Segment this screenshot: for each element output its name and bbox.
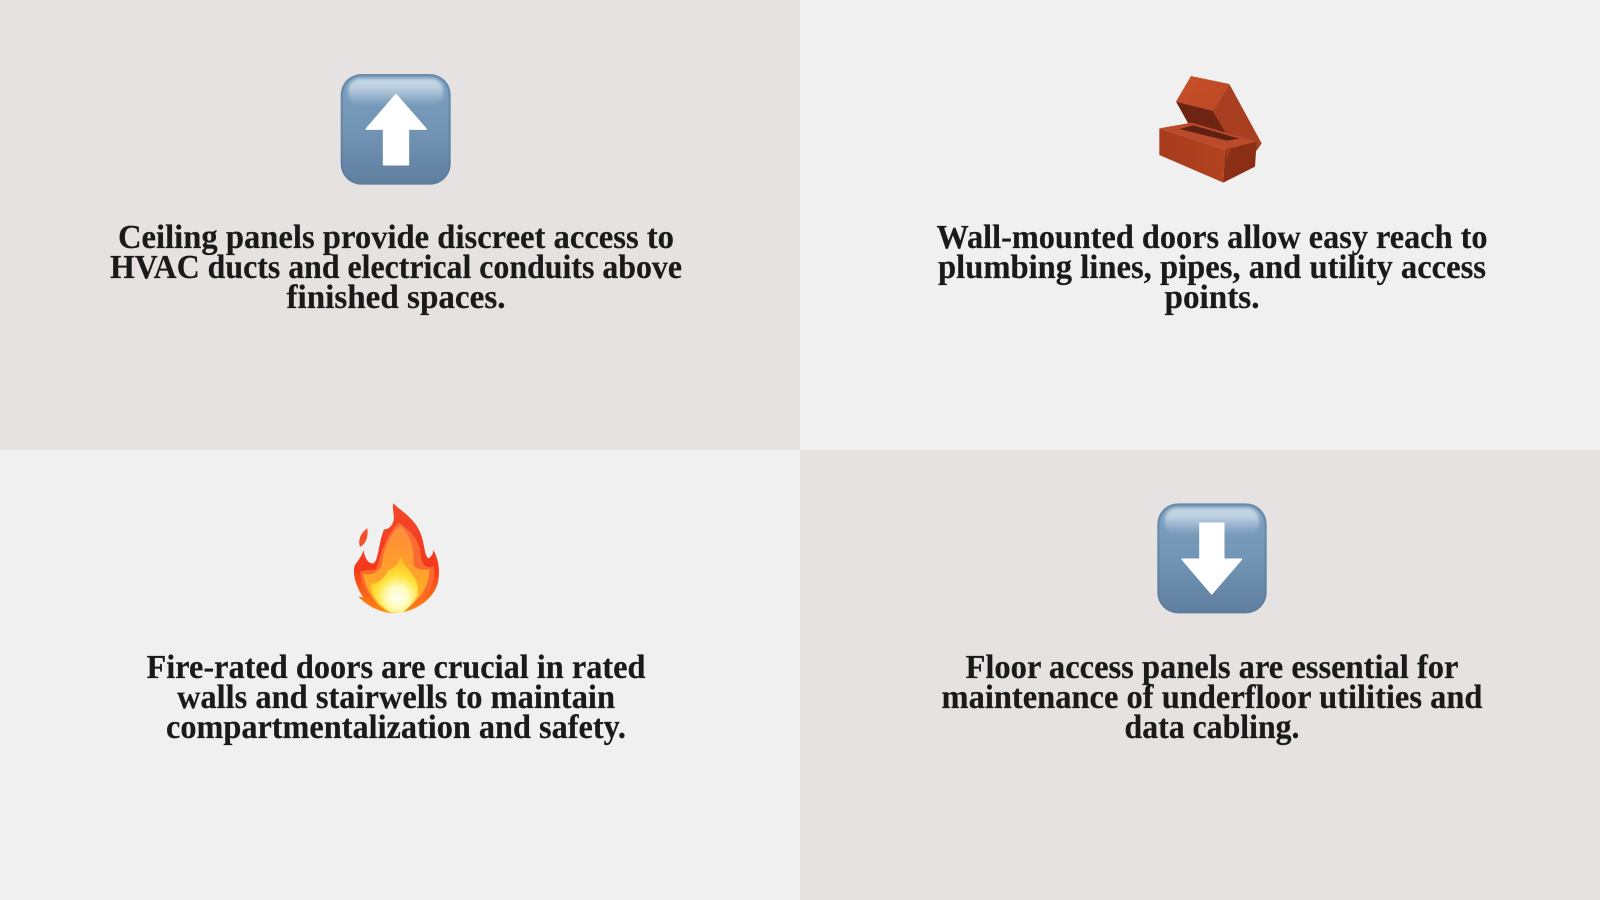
- panel: ceiling panels: [0, 0, 800, 450]
- panel: floor access panels: [800, 450, 1600, 900]
- icon: fire: [354, 503, 439, 613]
- text: wall-mounted doors: points.: [1164, 279, 1260, 316]
- panel: fire-rated doors: [0, 450, 800, 900]
- text: fire-rated doors: walls and stairwells to maintain: [177, 679, 615, 716]
- icon: up arrow: [341, 74, 451, 185]
- text: floor access panels: data cabling.: [1124, 709, 1300, 746]
- text: floor access panels: maintenance of underfloor utilities and: [942, 679, 1483, 716]
- icon: down arrow: [1157, 503, 1267, 613]
- text: fire-rated doors: [146, 649, 646, 746]
- icon: brick: [1159, 76, 1262, 183]
- text: floor access panels: [942, 649, 1483, 746]
- text: ceiling panels: HVAC ducts and electrical conduits above: [110, 249, 682, 286]
- text: ceiling panels: finished spaces.: [286, 279, 506, 316]
- text: wall-mounted doors: [936, 219, 1488, 316]
- text: ceiling panels: [110, 219, 682, 316]
- text: fire-rated doors: compartmentalization and safety.: [166, 709, 626, 746]
- text: floor access panels: Floor access panels are essential for: [966, 649, 1458, 686]
- text: wall-mounted doors: Wall-mounted doors allow easy reach to: [936, 219, 1488, 256]
- text: wall-mounted doors: plumbing lines, pipes, and utility access: [938, 249, 1486, 286]
- panel: wall-mounted doors: [800, 0, 1600, 450]
- text: ceiling panels: Ceiling panels provide discreet access to: [118, 219, 674, 256]
- text: fire-rated doors: Fire-rated doors are crucial in rated: [146, 649, 646, 686]
